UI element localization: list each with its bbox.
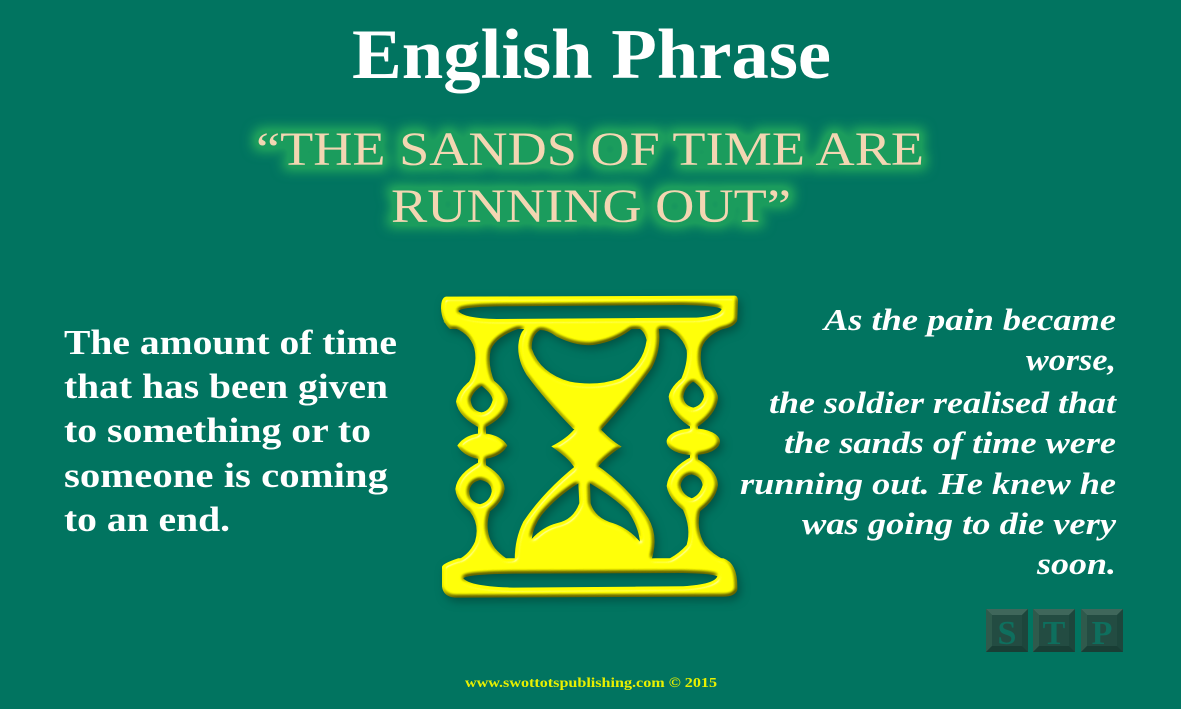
logo block: P: P [1092,615,1112,652]
logo block: S: S [998,615,1016,652]
example sentence: the soldier realised that [769,385,1118,420]
phrase heading: RUNNING OUT” [391,180,791,233]
example sentence: was going to die very [802,506,1116,541]
definition text: that has been given [64,367,388,406]
phrase heading: “THE SANDS OF TIME ARE [256,123,924,176]
definition text: to something or to [64,411,371,450]
icon: hourglass [441,296,738,598]
logo: STP blocks [986,609,1123,652]
example sentence: soon. [1036,546,1116,581]
example sentence: running out. He knew he [740,466,1116,501]
logo block: T: T [1043,615,1066,652]
example sentence [740,302,1118,581]
phrase heading [256,123,924,233]
definition text: to an end. [64,500,230,539]
example sentence: As the pain became [822,302,1116,337]
definition text [64,323,397,539]
definition text: someone is coming [64,456,389,495]
definition text: The amount of time [64,323,397,362]
example sentence: the sands of time were [784,425,1116,460]
example sentence: worse, [1026,342,1116,377]
title: English Phrase [352,16,831,94]
footer: website and copyright: www.swottotspublishing.com © 2015 [465,676,717,691]
